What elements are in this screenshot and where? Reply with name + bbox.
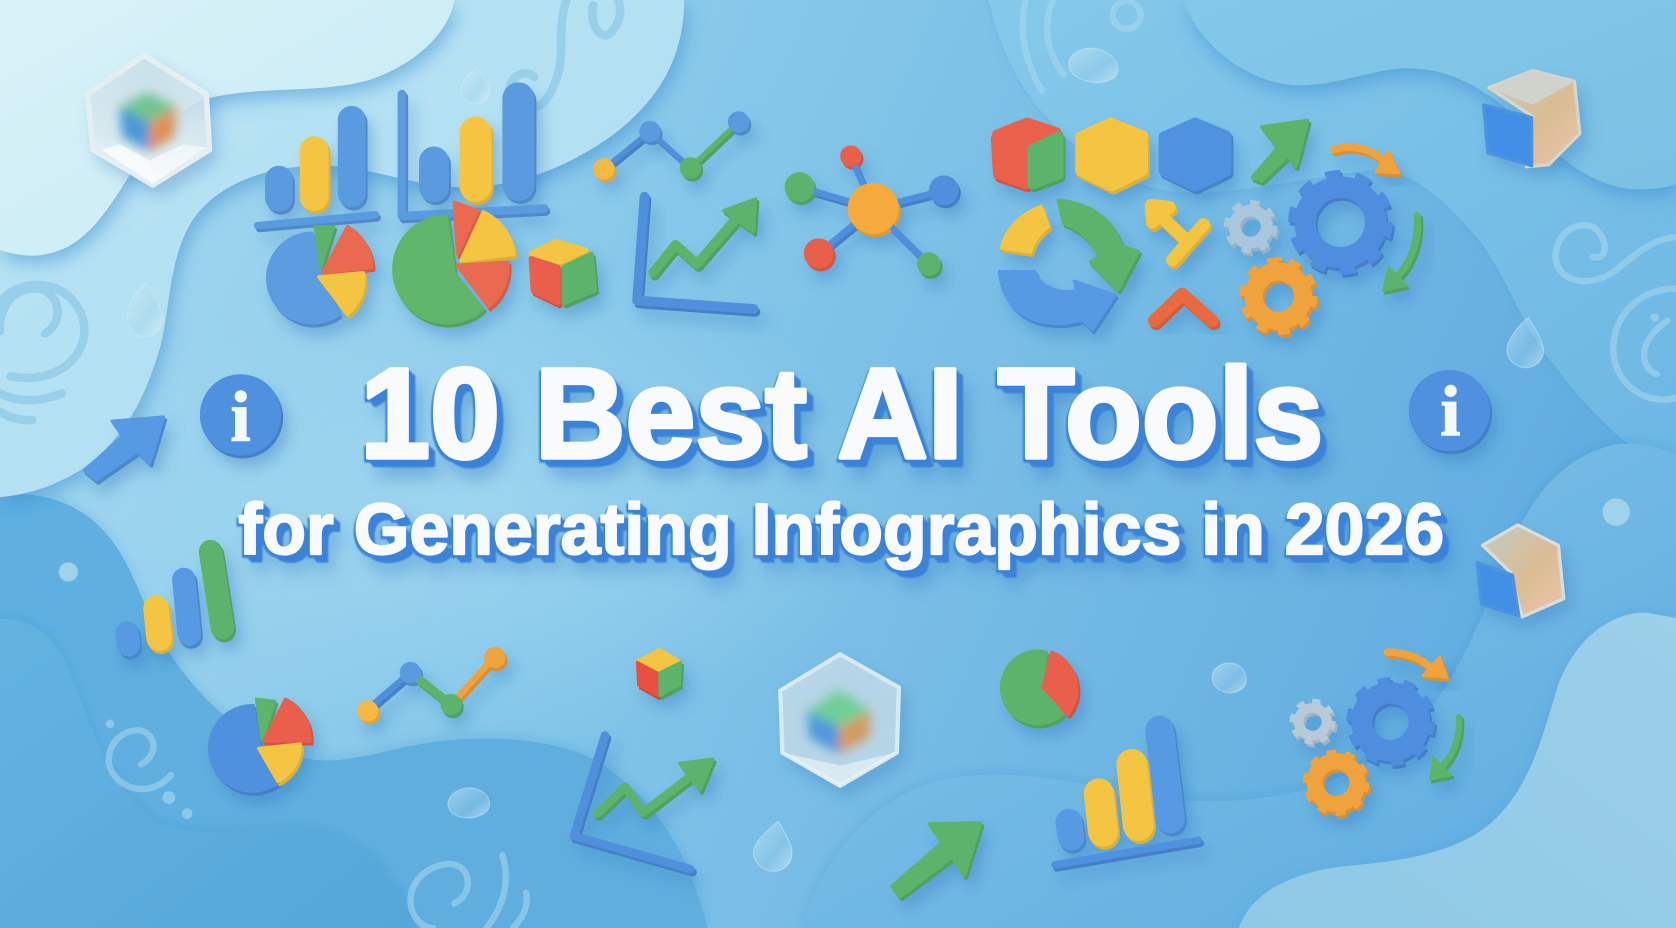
- cube row: [996, 123, 1226, 186]
- title line one: 10 Best AI Tools: [360, 343, 1323, 486]
- blob: bottom left front: [0, 619, 417, 928]
- line chart: top: [593, 111, 749, 180]
- molecule network: [785, 145, 959, 276]
- arrow: green bottom curve: [1430, 717, 1459, 779]
- arrow: green bottom: [893, 823, 980, 896]
- cycle arrows: [999, 200, 1138, 329]
- blob: bottom right light: [1239, 613, 1676, 928]
- gear: blue large: [1292, 174, 1388, 270]
- gear: grey bottom: [1292, 701, 1333, 742]
- blob: bottom left wave: [0, 494, 708, 928]
- glass cube: bottom centre: [780, 654, 899, 786]
- red chevron: [1154, 294, 1212, 321]
- gear: grey: [1227, 203, 1274, 250]
- glass cube: top left: [88, 56, 210, 185]
- water drops: [127, 48, 1543, 871]
- bar chart: left rising: [127, 552, 222, 645]
- cube: red green yellow: [531, 242, 594, 303]
- arrow: orange bottom: [1387, 652, 1447, 678]
- blob: bottom right wave: [802, 444, 1676, 928]
- blob: top right outer: [989, 0, 1676, 470]
- growth chart: top: [637, 197, 756, 309]
- pie chart: bottom left: [210, 699, 310, 791]
- glass cube: top right: [1484, 71, 1580, 167]
- cube: small: [637, 649, 681, 696]
- info icon: left: i: [231, 378, 250, 456]
- info icon: right: [1409, 370, 1490, 451]
- yellow branch arrow: [1151, 205, 1204, 260]
- bar chart: top second: [402, 94, 544, 216]
- arrow: orange curve: [1334, 147, 1399, 173]
- title line two: for Generating Infographics in 2026: [238, 489, 1444, 570]
- gear: orange bottom: [1306, 753, 1366, 813]
- arrow: green up: [1253, 121, 1307, 181]
- dots: [59, 498, 1630, 582]
- blob: top left mid: [0, 0, 684, 497]
- bar chart: top left: [258, 120, 375, 226]
- arrow: green down: [1383, 216, 1418, 291]
- glass cube: right lower: [1477, 525, 1564, 617]
- gear: orange: [1243, 261, 1314, 331]
- bar chart: bottom: [1055, 730, 1198, 865]
- pie chart: top second: [394, 202, 514, 323]
- line chart: bottom: [357, 647, 506, 722]
- info icon: right: i: [1441, 373, 1460, 451]
- pie chart: top first: [268, 227, 372, 323]
- arrow: blue left: [84, 417, 164, 480]
- pie chart: bottom centre: [1001, 651, 1077, 724]
- info icon: left: [200, 374, 281, 456]
- growth chart: bottom: [574, 736, 713, 869]
- blob: top left light: [0, 0, 454, 256]
- blob: top right inner: [1184, 0, 1676, 189]
- gear: blue bottom: [1350, 681, 1431, 762]
